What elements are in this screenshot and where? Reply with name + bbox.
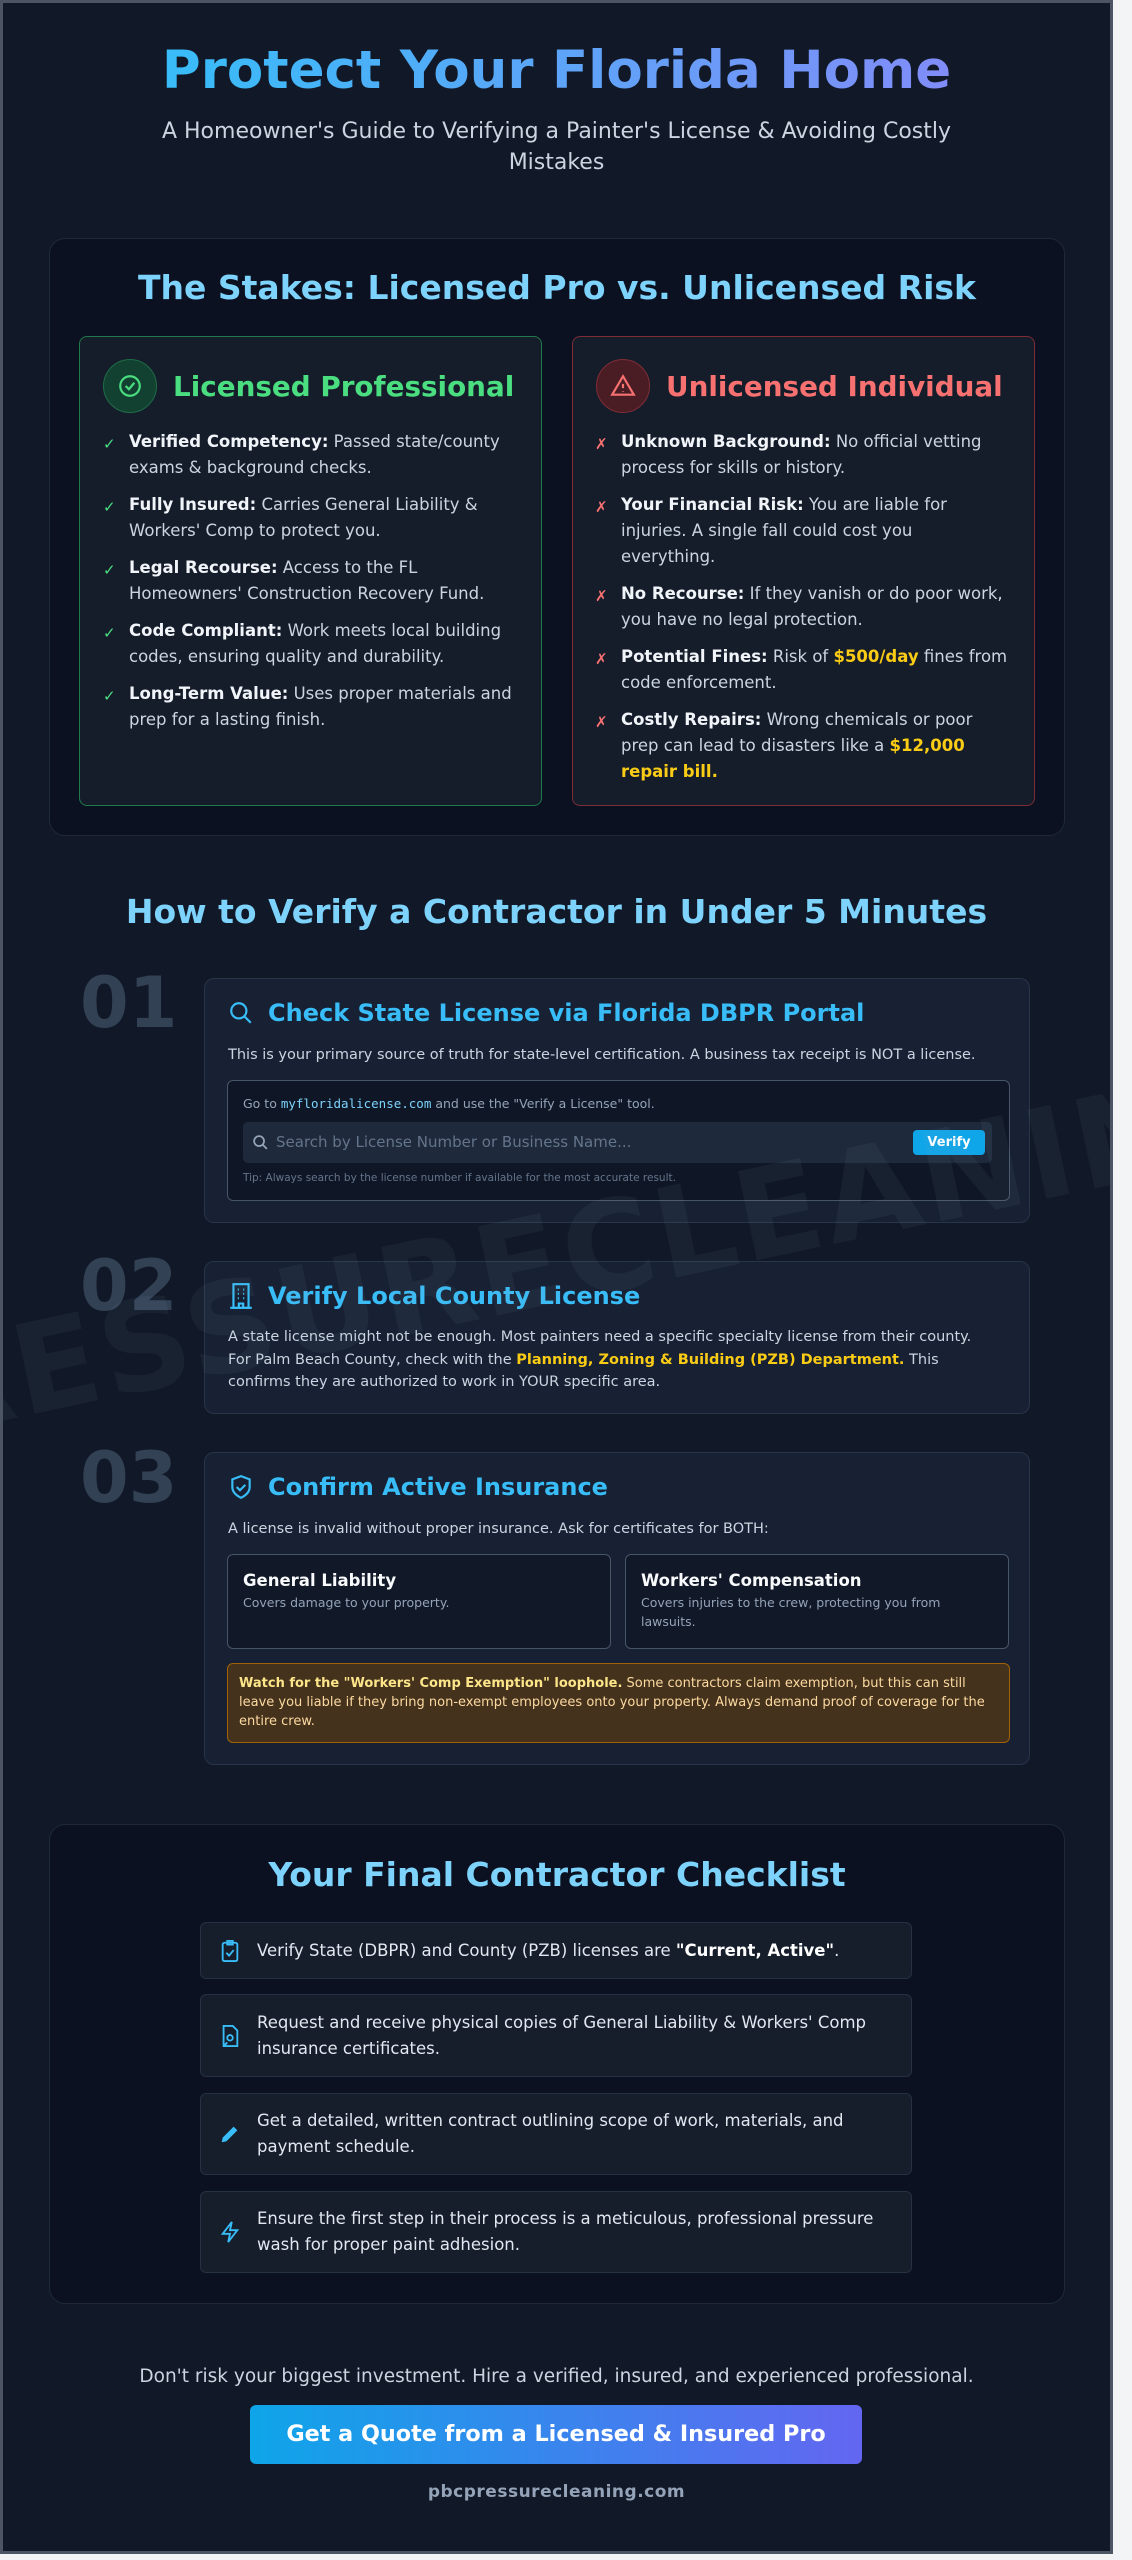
panel: final checklist <box>49 1824 1065 2304</box>
list: unlicensed risks: Potential Fines: Risk of $500/day fines from <box>621 647 1007 666</box>
list: licensed benefits: Code Compliant: Work meets local building codes, ensuring quality and durability. <box>129 621 501 666</box>
list: licensed benefits <box>103 432 512 729</box>
step 3: insurance <box>204 1452 1030 1765</box>
heading: stakes: The Stakes: Licensed Pro vs. Unlicensed Risk <box>138 268 976 307</box>
step 2: county license <box>204 1261 1030 1414</box>
step 3 heading: Confirm Active Insurance <box>268 1473 608 1501</box>
list: unlicensed risks: you have no legal protection. <box>621 610 863 629</box>
step 2 heading: Verify Local County License <box>268 1282 640 1310</box>
step 1 description: This is your primary source of truth for state-level certification. A business tax receipt is NOT a license. <box>228 1047 976 1063</box>
verify button: Verify <box>927 1135 971 1150</box>
list: unlicensed risks: prep can lead to disasters like a $12,000 <box>621 736 965 755</box>
card: unlicensed individual <box>572 336 1035 806</box>
list: licensed benefits: Fully Insured: Carries General Liability & Workers' Comp to protect you. <box>129 495 478 540</box>
checklist item 2 <box>200 1994 912 2077</box>
list: unlicensed risks: Unknown Background: No official vetting process for skills or history. <box>621 432 982 477</box>
callout: exemption warning: Watch for the "Workers' Comp Exemption" loophole. Some contractors claim exemption, but this can still leave you liable if they bring non-exempt employees onto your property. Always demand proof of coverage for the entire crew. <box>239 1676 985 1729</box>
list: unlicensed risks: everything. <box>621 547 715 566</box>
box: workers compensation: Workers' Compensation <box>641 1571 862 1590</box>
list: unlicensed risks: repair bill. <box>621 762 718 781</box>
list: unlicensed risks: ✗ <box>595 650 608 668</box>
list: unlicensed risks: ✗ <box>595 713 608 731</box>
domain: pbcpressurecleaning.com <box>428 2482 685 2502</box>
list: unlicensed risks: code enforcement. <box>621 673 777 692</box>
box: general liability: Covers damage to your property. <box>243 1595 449 1610</box>
list: licensed benefits: ✓ <box>103 687 116 705</box>
list: licensed benefits: Verified Competency: Passed state/county exams & background checks. <box>129 432 500 477</box>
mock search box <box>227 1080 1010 1201</box>
box: general liability: General Liability <box>243 1571 396 1590</box>
box: workers compensation <box>625 1554 1009 1649</box>
header: licensed: Licensed Professional <box>173 370 514 402</box>
checklist item 3: Get a detailed, written contract outlining scope of work, materials, and payment schedule. <box>257 2111 844 2156</box>
header: unlicensed <box>596 359 1003 413</box>
list: licensed benefits: ✓ <box>103 561 116 579</box>
list: licensed benefits: Long-Term Value: Uses proper materials and prep for a lasting finish. <box>129 684 512 729</box>
list: unlicensed risks: No Recourse: If they vanish or do poor work, <box>621 584 1003 603</box>
step number 01: 01 <box>80 962 177 1044</box>
checklist item 4: Ensure the first step in their process is a meticulous, professional pressure wash for proper paint adhesion. <box>257 2209 873 2254</box>
list: unlicensed risks: ✗ <box>595 587 608 605</box>
step 2 description: A state license might not be enough. Most painters need a specific specialty license from their county. For Palm Beach County, check with the Planning, Zoning & Building (PZB) Department. This confirms they are authorized to work in YOUR specific area. <box>228 1329 971 1390</box>
step 1 heading: Check State License via Florida DBPR Portal <box>268 999 864 1027</box>
box: workers compensation: Covers injuries to the crew, protecting you from lawsuits. <box>641 1595 940 1629</box>
box: general liability <box>227 1554 611 1649</box>
list: unlicensed risks: ✗ <box>595 435 608 453</box>
checklist item 2: Request and receive physical copies of General Liability & Workers' Comp insurance certificates. <box>257 2012 866 2058</box>
panel: stakes comparison <box>49 238 1065 836</box>
list: licensed benefits: Legal Recourse: Access to the FL Homeowners' Construction Recovery Fund. <box>129 558 484 603</box>
checklist item 3 <box>200 2093 912 2175</box>
verify button <box>913 1130 985 1155</box>
list: unlicensed risks <box>595 432 1007 781</box>
list: unlicensed risks: ✗ <box>595 498 608 516</box>
list: licensed benefits: ✓ <box>103 498 116 516</box>
step 3 description: A license is invalid without proper insurance. Ask for certificates for BOTH: <box>228 1521 769 1537</box>
CTA button: Get a Quote from a Licensed & Insured Pro <box>286 2421 826 2447</box>
subtitle: A Homeowner's Guide to Verifying a Painter's License & Avoiding Costly Mistakes <box>162 119 951 175</box>
mock search box: Tip: Always search by the license number if available for the most accurate result. <box>243 1172 676 1184</box>
header: unlicensed: Unlicensed Individual <box>666 370 1003 402</box>
checklist item 4 <box>200 2191 912 2273</box>
step number 03: 03 <box>80 1437 177 1519</box>
CTA button <box>250 2405 862 2464</box>
header: licensed <box>103 359 514 413</box>
mock search box: Go to myfloridalicense.com and use the "Verify a License" tool. <box>243 1096 655 1111</box>
title: Protect Your Florida Home <box>162 40 951 101</box>
step 1: state license <box>204 978 1030 1223</box>
footer text: Don't risk your biggest investment. Hire a verified, insured, and experienced professional. <box>139 2366 974 2387</box>
list: licensed benefits: ✓ <box>103 624 116 642</box>
list: licensed benefits: ✓ <box>103 435 116 453</box>
list: unlicensed risks: injuries. A single fall could cost you <box>621 521 912 540</box>
search input <box>243 1122 992 1163</box>
search input: Search by License Number or Business Name... <box>276 1133 631 1151</box>
heading: how to verify: How to Verify a Contractor in Under 5 Minutes <box>126 892 987 931</box>
callout: exemption warning <box>227 1663 1010 1743</box>
heading: checklist: Your Final Contractor Checklist <box>268 1855 846 1894</box>
checklist item 1: Verify State (DBPR) and County (PZB) licenses are "Current, Active". <box>257 1940 839 1960</box>
list: unlicensed risks: Costly Repairs: Wrong chemicals or poor <box>621 710 972 729</box>
step number 02: 02 <box>80 1245 177 1327</box>
list: unlicensed risks: Your Financial Risk: You are liable for <box>621 495 947 514</box>
checklist item 1 <box>200 1922 912 1979</box>
card: licensed professional <box>79 336 542 806</box>
